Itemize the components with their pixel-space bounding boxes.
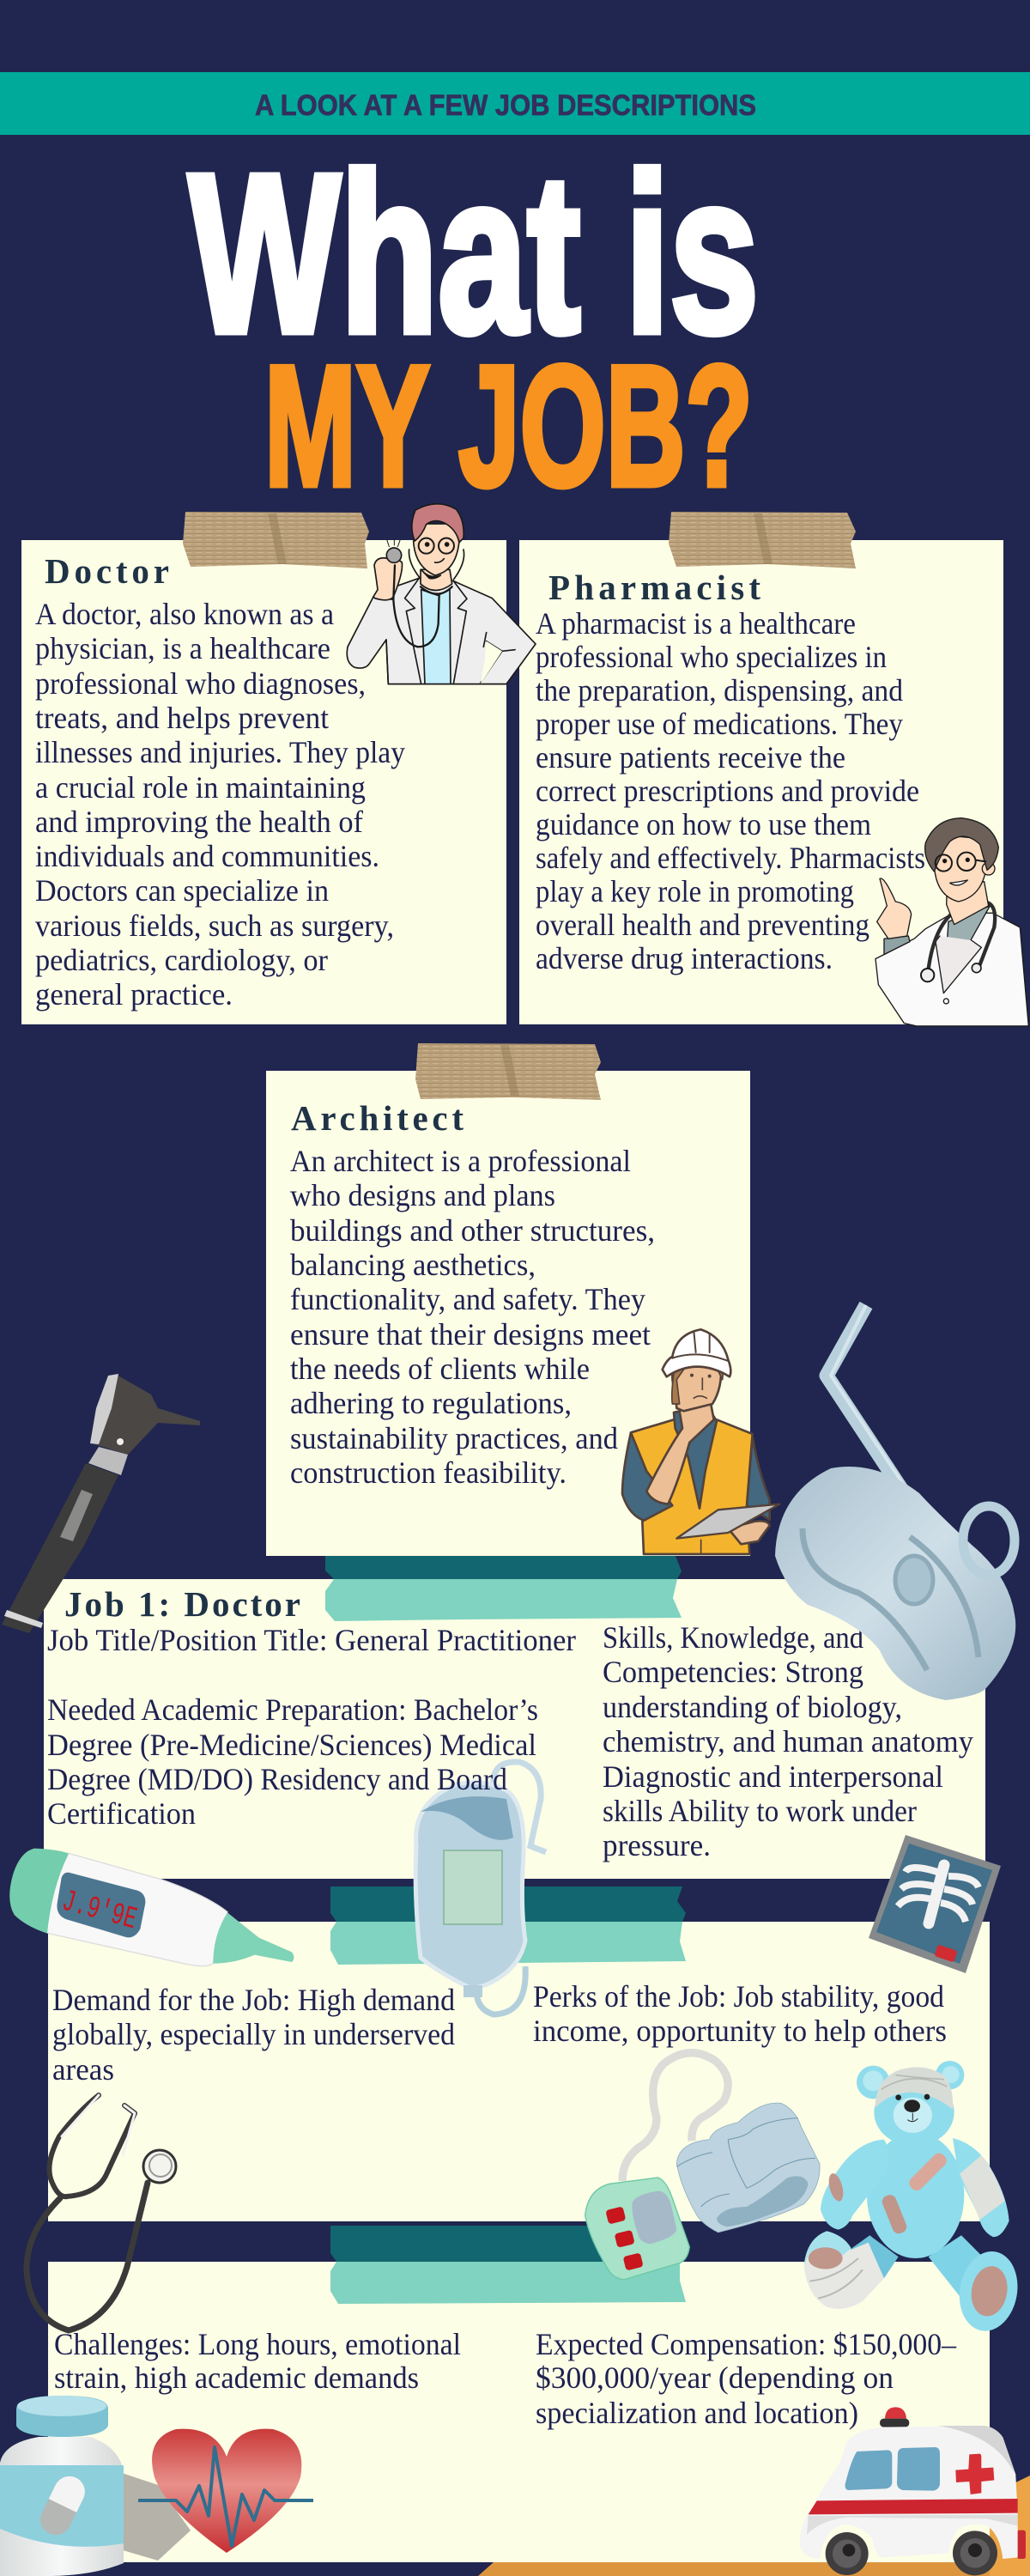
title: What is bbox=[189, 127, 759, 380]
doctor description: a crucial role in maintaining bbox=[35, 770, 366, 805]
pharmacist description: professional who specializes in bbox=[536, 640, 887, 674]
skills and competencies: Competencies: Strong bbox=[603, 1655, 863, 1689]
tape: panel three bbox=[330, 2226, 686, 2304]
pharmacist heading: Pharmacist bbox=[548, 568, 760, 607]
architect description: functionality, and safety. They bbox=[290, 1282, 645, 1316]
panel: job 1 skills and requirements bbox=[44, 1579, 985, 1879]
architect description: adhering to regulations, bbox=[290, 1386, 572, 1420]
pharmacist description: ensure patients receive the bbox=[536, 740, 845, 775]
doctor description: physician, is a healthcare bbox=[35, 631, 330, 665]
icon: x-ray film bbox=[869, 1835, 1001, 1973]
panel: doctor bbox=[21, 540, 506, 1024]
pharmacist description: the preparation, dispensing, and bbox=[536, 673, 903, 708]
job title and academic preparation: Degree (Pre-Medicine/Sciences) Medical bbox=[47, 1728, 536, 1762]
architect description: who designs and plans bbox=[290, 1178, 555, 1212]
pharmacist description: overall health and preventing bbox=[536, 908, 869, 942]
icon: thermometer: J.9'9E bbox=[58, 1884, 141, 1937]
icon: stethoscope bbox=[27, 2095, 176, 2330]
doctor description: Doctors can specialize in bbox=[35, 873, 329, 908]
pharmacist description bbox=[536, 606, 925, 975]
panel: pharmacist bbox=[519, 540, 1003, 1024]
pharmacist description: adverse drug interactions. bbox=[536, 941, 833, 975]
challenges bbox=[54, 2327, 461, 2395]
icon: otoscope bbox=[2, 1374, 200, 1633]
doctor description: treats, and helps prevent bbox=[35, 701, 329, 735]
tape: panel two bbox=[330, 1886, 686, 1965]
demand for the job: areas bbox=[52, 2052, 114, 2087]
doctor description: various fields, such as surgery, bbox=[35, 908, 394, 943]
challenges: Challenges: Long hours, emotional bbox=[54, 2327, 461, 2361]
architect description: ensure that their designs meet bbox=[290, 1317, 651, 1352]
architect description: buildings and other structures, bbox=[290, 1213, 655, 1248]
expected compensation bbox=[536, 2327, 957, 2430]
skills and competencies: Diagnostic and interpersonal bbox=[603, 1759, 943, 1794]
perks of the job: income, opportunity to help others bbox=[533, 2014, 947, 2048]
architect description bbox=[290, 1144, 655, 1490]
tape: pharmacist bbox=[669, 512, 856, 568]
perks of the job bbox=[533, 1979, 947, 2048]
doctor description: professional who diagnoses, bbox=[35, 666, 366, 701]
doctor description: pediatrics, cardiology, or bbox=[35, 943, 328, 977]
architect description: construction feasibility. bbox=[290, 1455, 566, 1490]
icon: doctor with stethoscope bbox=[347, 504, 536, 684]
architect description: the needs of clients while bbox=[290, 1352, 590, 1386]
tape: job 1 bbox=[325, 1556, 682, 1621]
pharmacist description: safely and effectively. Pharmacists bbox=[536, 841, 925, 875]
pharmacist description: A pharmacist is a healthcare bbox=[536, 606, 856, 641]
title: MY JOB? bbox=[264, 331, 753, 522]
pharmacist description: correct prescriptions and provide bbox=[536, 774, 919, 808]
expected compensation: specialization and location) bbox=[536, 2396, 858, 2430]
job title and academic preparation: Degree (MD/DO) Residency and Board bbox=[47, 1762, 507, 1796]
icon: ambulance bbox=[800, 2407, 1026, 2575]
icon: architect thinking bbox=[622, 1329, 779, 1554]
expected compensation: $300,000/year (depending on bbox=[536, 2360, 894, 2395]
doctor description: illnesses and injuries. They play bbox=[35, 735, 405, 769]
architect description: An architect is a professional bbox=[290, 1144, 631, 1178]
doctor description: and improving the health of bbox=[35, 805, 363, 839]
tape: architect bbox=[415, 1043, 601, 1100]
icon: thermometer bbox=[9, 1849, 294, 1966]
icon: kidney dish with tube bbox=[775, 1305, 1015, 1700]
doctor description bbox=[35, 597, 405, 1012]
job title and academic preparation: Job Title/Position Title: General Practitioner bbox=[47, 1623, 576, 1657]
skills and competencies: skills Ability to work under bbox=[603, 1794, 917, 1828]
icon: bandaged teddy bear bbox=[804, 2061, 1024, 2336]
demand for the job: globally, especially in underserved bbox=[52, 2017, 455, 2051]
job title and academic preparation: Certification bbox=[47, 1796, 196, 1831]
job title and academic preparation bbox=[47, 1623, 576, 1831]
panel: challenges and compensation bbox=[48, 2262, 990, 2562]
doctor description: general practice. bbox=[35, 977, 233, 1012]
job heading: Job 1: Doctor bbox=[64, 1584, 300, 1624]
perks of the job: Perks of the Job: Job stability, good bbox=[533, 1979, 944, 2014]
skills and competencies: understanding of biology, bbox=[603, 1690, 902, 1724]
header banner bbox=[0, 72, 1030, 135]
skills and competencies: pressure. bbox=[603, 1828, 711, 1862]
icon: heart with pulse line bbox=[138, 2429, 313, 2553]
icon: blood pressure monitor bbox=[585, 2053, 820, 2280]
icon: medicine bottle and blister pack bbox=[0, 2396, 191, 2576]
icon: pharmacist pointing bbox=[876, 818, 1028, 1026]
doctor description: A doctor, also known as a bbox=[35, 597, 334, 631]
job title and academic preparation: Needed Academic Preparation: Bachelor’s bbox=[47, 1692, 538, 1727]
pharmacist description: play a key role in promoting bbox=[536, 874, 854, 908]
doctor heading: Doctor bbox=[45, 551, 169, 591]
pharmacist description: proper use of medications. They bbox=[536, 707, 903, 741]
panel: demand and perks bbox=[48, 1922, 990, 2221]
skills and competencies: chemistry, and human anatomy bbox=[603, 1724, 973, 1759]
demand for the job bbox=[52, 1983, 455, 2087]
icon: iv bag bbox=[415, 1762, 546, 2014]
doctor description: individuals and communities. bbox=[35, 839, 379, 873]
pharmacist description: guidance on how to use them bbox=[536, 807, 871, 841]
challenges: strain, high academic demands bbox=[54, 2360, 419, 2395]
architect description: balancing aesthetics, bbox=[290, 1248, 536, 1282]
skills and competencies bbox=[603, 1620, 973, 1862]
tape: doctor bbox=[183, 512, 369, 568]
panel: architect bbox=[266, 1071, 750, 1556]
architect heading: Architect bbox=[291, 1098, 464, 1138]
expected compensation: Expected Compensation: $150,000– bbox=[536, 2327, 957, 2361]
skills and competencies: Skills, Knowledge, and bbox=[603, 1620, 863, 1655]
architect description: sustainability practices, and bbox=[290, 1421, 618, 1455]
title bbox=[189, 127, 759, 522]
orange corner shape bbox=[478, 2476, 1030, 2576]
header banner: A LOOK AT A FEW JOB DESCRIPTIONS bbox=[255, 89, 756, 122]
demand for the job: Demand for the Job: High demand bbox=[52, 1983, 455, 2017]
